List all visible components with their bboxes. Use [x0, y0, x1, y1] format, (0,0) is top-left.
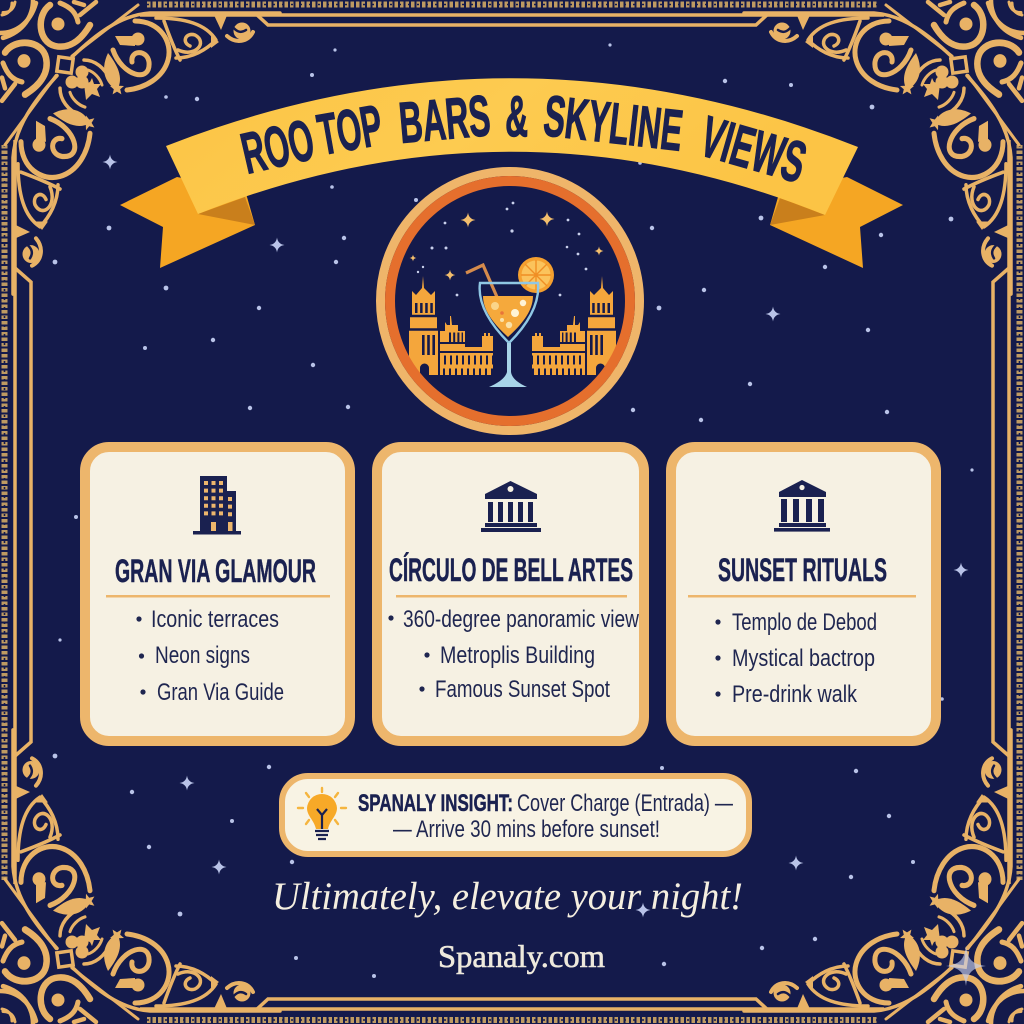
title text: BARS — [396, 83, 493, 156]
bullet list: Pre-drink walk — [732, 681, 858, 708]
callout text — [358, 790, 733, 843]
bullet list — [715, 609, 877, 708]
card — [85, 447, 350, 741]
ribbon tail: left — [120, 177, 255, 268]
card — [671, 447, 936, 741]
ribbon fold: left — [198, 197, 255, 225]
bullet list: 360-degree panoramic view — [403, 606, 640, 633]
badge stars — [410, 202, 604, 296]
title text — [235, 83, 813, 196]
title text: ROO — [235, 107, 320, 187]
bullet list: Iconic terraces — [151, 606, 279, 633]
sparkle watermark — [946, 946, 986, 986]
divider — [106, 595, 330, 598]
castle: right wing — [532, 276, 616, 375]
bullet list — [388, 606, 640, 703]
bullet list: Mystical bactrop — [732, 645, 875, 672]
ribbon fold: right — [770, 198, 825, 225]
badge rings — [380, 172, 640, 430]
bullet list: Neon signs — [155, 642, 250, 669]
callout text: SPANALY INSIGHT: — [358, 790, 513, 817]
panel: Círculo de Bellas Artes — [377, 447, 644, 741]
title text: & — [505, 84, 529, 149]
ribbon band — [166, 78, 858, 215]
drink — [483, 296, 533, 337]
bullet list: Famous Sunset Spot — [435, 676, 610, 703]
icon: temple — [481, 481, 541, 532]
castle: left wing — [409, 276, 493, 375]
icon: temple — [774, 480, 830, 532]
corner ornament: top left — [0, 0, 280, 294]
corner ornament: bottom left — [0, 730, 280, 1024]
bullet list: Gran Via Guide — [157, 679, 284, 706]
card — [377, 447, 644, 741]
corner ornament: top right — [744, 0, 1024, 294]
heading: CÍRCULO DE BELL ARTES — [389, 552, 633, 588]
callout box — [282, 776, 749, 854]
bullet list — [136, 606, 284, 706]
title text: TOP — [313, 93, 387, 168]
callout: Spanaly insight — [282, 776, 749, 854]
heading: SUNSET RITUALS — [718, 552, 887, 588]
callout text: Cover Charge (Entrada) — — [517, 790, 733, 817]
title text: VIEWS — [693, 104, 813, 196]
title text: SKYLINE — [541, 83, 686, 164]
cocktail glass — [466, 257, 554, 387]
heading: GRAN VIA GLAMOUR — [115, 553, 316, 589]
ribbon tail: right — [770, 177, 903, 268]
corner ornament: bottom right — [744, 730, 1024, 1024]
divider — [396, 595, 627, 598]
bullet list: Templo de Debod — [732, 609, 877, 636]
divider — [688, 595, 916, 598]
orange slice — [518, 257, 554, 293]
bullet list: Metroplis Building — [440, 642, 595, 669]
icon: building — [193, 476, 241, 534]
title ribbon — [120, 78, 903, 268]
badge: cocktail and skyline — [380, 172, 640, 430]
panel: Gran Via Glamour — [85, 447, 350, 741]
website: Spanaly.com — [438, 938, 605, 974]
castle skyline — [409, 276, 616, 375]
tagline: Ultimately, elevate your night! — [272, 875, 743, 918]
panel: Sunset Rituals — [671, 447, 936, 741]
straw — [466, 265, 497, 297]
badge background — [390, 181, 630, 421]
stem and foot — [489, 343, 527, 387]
glass outline — [480, 283, 538, 343]
bubbles — [491, 300, 526, 328]
icon: light bulb — [298, 788, 346, 839]
callout text: — Arrive 30 mins before sunset! — [393, 816, 660, 843]
